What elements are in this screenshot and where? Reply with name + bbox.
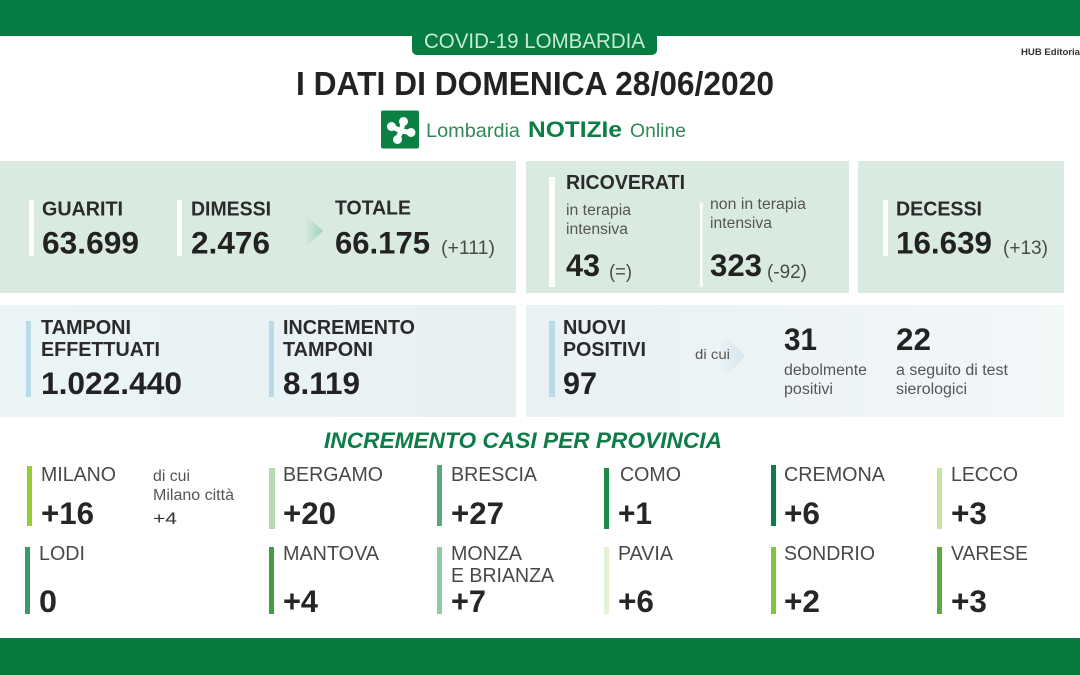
stat: dimessi — [177, 198, 271, 260]
province: Brescia: +27 — [451, 495, 504, 531]
stat: incremento tamponi: INCREMENTO — [283, 317, 415, 339]
panel: guariti, dimessi, totale — [0, 161, 516, 293]
stat: dimessi: DIMESSI — [191, 198, 271, 220]
province: Sondrio: +2 — [784, 583, 820, 619]
logo: Lombardia Notizie Online: Lombardia — [426, 121, 520, 142]
bottom green band — [0, 638, 1080, 675]
stat: nuovi positivi — [549, 317, 646, 401]
stat: debolmente positivi — [784, 321, 867, 398]
province: Sondrio: SONDRIO — [784, 542, 875, 565]
stat: terapia intensiva — [566, 202, 632, 283]
heading: ricoverati: RICOVERATI — [566, 172, 685, 194]
stat: test sierologici — [896, 321, 1009, 398]
province: Monza e Brianza — [437, 542, 554, 619]
note: di cui Milano città: di cui — [153, 468, 190, 485]
panel: decessi — [858, 161, 1064, 293]
stat: incremento tamponi: TAMPONI — [283, 339, 373, 361]
stat: totale: TOTALE — [335, 198, 411, 220]
note: di cui Milano città — [153, 468, 234, 528]
province: Cremona: CREMONA — [784, 463, 885, 486]
province: Milano — [27, 463, 234, 531]
province: Sondrio — [771, 542, 875, 619]
province: Lecco: LECCO — [951, 463, 1018, 486]
stat: totale: 66.175 — [335, 224, 430, 260]
heading: incremento casi per provincia: INCREMENTO CASI PER PROVINCIA — [324, 428, 722, 453]
stat: nuovi positivi: POSITIVI — [563, 339, 646, 361]
panel: nuovi positivi — [526, 305, 1064, 417]
stat: nuovi positivi: 97 — [563, 365, 597, 401]
province: Como: +1 — [618, 495, 652, 531]
province: Milano: +16 — [41, 495, 94, 531]
stat: guariti: GUARITI — [42, 198, 123, 220]
stat: debolmente positivi: 31 — [784, 321, 817, 357]
province: Varese: +3 — [951, 583, 987, 619]
text: di cui: di cui — [695, 346, 730, 362]
stat: tamponi effettuati: TAMPONI — [41, 317, 131, 339]
province: Bergamo: +20 — [283, 495, 336, 531]
province: Lecco: +3 — [951, 495, 987, 531]
panel: tamponi — [0, 305, 516, 417]
province: Varese: VARESE — [951, 542, 1028, 565]
province: Lodi: 0 — [39, 583, 57, 619]
stat: guariti: 63.699 — [42, 224, 139, 260]
province: Monza e Brianza: E BRIANZA — [451, 564, 554, 587]
province: Bergamo: BERGAMO — [283, 463, 383, 486]
province: Bergamo — [269, 463, 383, 531]
stat: dimessi: 2.476 — [191, 224, 270, 260]
title: I DATI DI DOMENICA 28/06/2020 — [296, 65, 774, 102]
note: di cui Milano città: +4 — [153, 509, 177, 528]
stat: tamponi effettuati: EFFETTUATI — [41, 339, 160, 361]
province: Lodi — [25, 542, 85, 619]
stat: non in terapia intensiva: intensiva — [710, 215, 772, 232]
province: Brescia: BRESCIA — [451, 463, 537, 486]
province: Lecco — [937, 463, 1018, 531]
province: Monza e Brianza: +7 — [451, 583, 486, 619]
stat: guariti — [29, 198, 139, 260]
stat: non in terapia intensiva: 323 — [710, 247, 762, 283]
province: Como — [604, 463, 681, 531]
note: di cui Milano città: Milano città — [153, 487, 234, 504]
publisher note: HUB Editoria — [1021, 47, 1080, 57]
stat: totale — [335, 198, 495, 260]
logo: Lombardia Notizie Online: Online — [630, 121, 686, 142]
province: Brescia — [437, 463, 537, 531]
top green band — [0, 0, 1080, 36]
stat: terapia intensiva: (=) — [609, 262, 632, 283]
stat: tamponi effettuati: 1.022.440 — [41, 365, 182, 401]
province: Pavia — [604, 542, 673, 619]
arrow — [718, 340, 745, 372]
logo: Lombardia Notizie Online — [381, 110, 686, 148]
province: Cremona: +6 — [784, 495, 820, 531]
province: Pavia: PAVIA — [618, 542, 673, 565]
stat: terapia intensiva: 43 — [566, 247, 600, 283]
stat: non in terapia intensiva — [710, 196, 807, 283]
stat: non in terapia intensiva: non in terapia — [710, 196, 806, 213]
stat: nuovi positivi: NUOVI — [563, 317, 626, 339]
stat: debolmente positivi: positivi — [784, 381, 833, 398]
province: Cremona — [771, 463, 885, 531]
stat: test sierologici: sierologici — [896, 381, 967, 398]
stat: non in terapia intensiva: (-92) — [767, 262, 807, 283]
header tab: COVID-19 LOMBARDIA — [424, 30, 645, 53]
province: Lodi: LODI — [39, 542, 85, 565]
province: Mantova: +4 — [283, 583, 318, 619]
province: Como: COMO — [620, 463, 681, 486]
panel: ricoverati — [526, 161, 849, 293]
province: Milano: MILANO — [41, 463, 116, 486]
arrow — [305, 215, 323, 248]
province: Mantova: MANTOVA — [283, 542, 379, 565]
stat: incremento tamponi: 8.119 — [283, 365, 360, 401]
panel: decessi: DECESSI — [896, 198, 982, 220]
icon: rosa camuna — [381, 110, 419, 148]
logo: Lombardia Notizie Online: NOTIZIe — [528, 117, 622, 142]
province: Pavia: +6 — [618, 583, 654, 619]
province: Varese — [937, 542, 1028, 619]
stat: tamponi effettuati — [26, 317, 182, 401]
province: Mantova — [269, 542, 379, 619]
stat: totale: (+111) — [441, 238, 495, 259]
panel: decessi: (+13) — [1003, 238, 1048, 259]
province: Monza e Brianza: MONZA — [451, 542, 522, 565]
stat: debolmente positivi: debolmente — [784, 362, 867, 379]
stat: test sierologici: 22 — [896, 321, 931, 357]
stat: test sierologici: a seguito di test — [896, 362, 1009, 379]
stat: incremento tamponi — [269, 317, 415, 401]
stat: terapia intensiva: in terapia — [566, 202, 631, 219]
panel: decessi: 16.639 — [896, 224, 992, 260]
stat: terapia intensiva: intensiva — [566, 221, 628, 238]
